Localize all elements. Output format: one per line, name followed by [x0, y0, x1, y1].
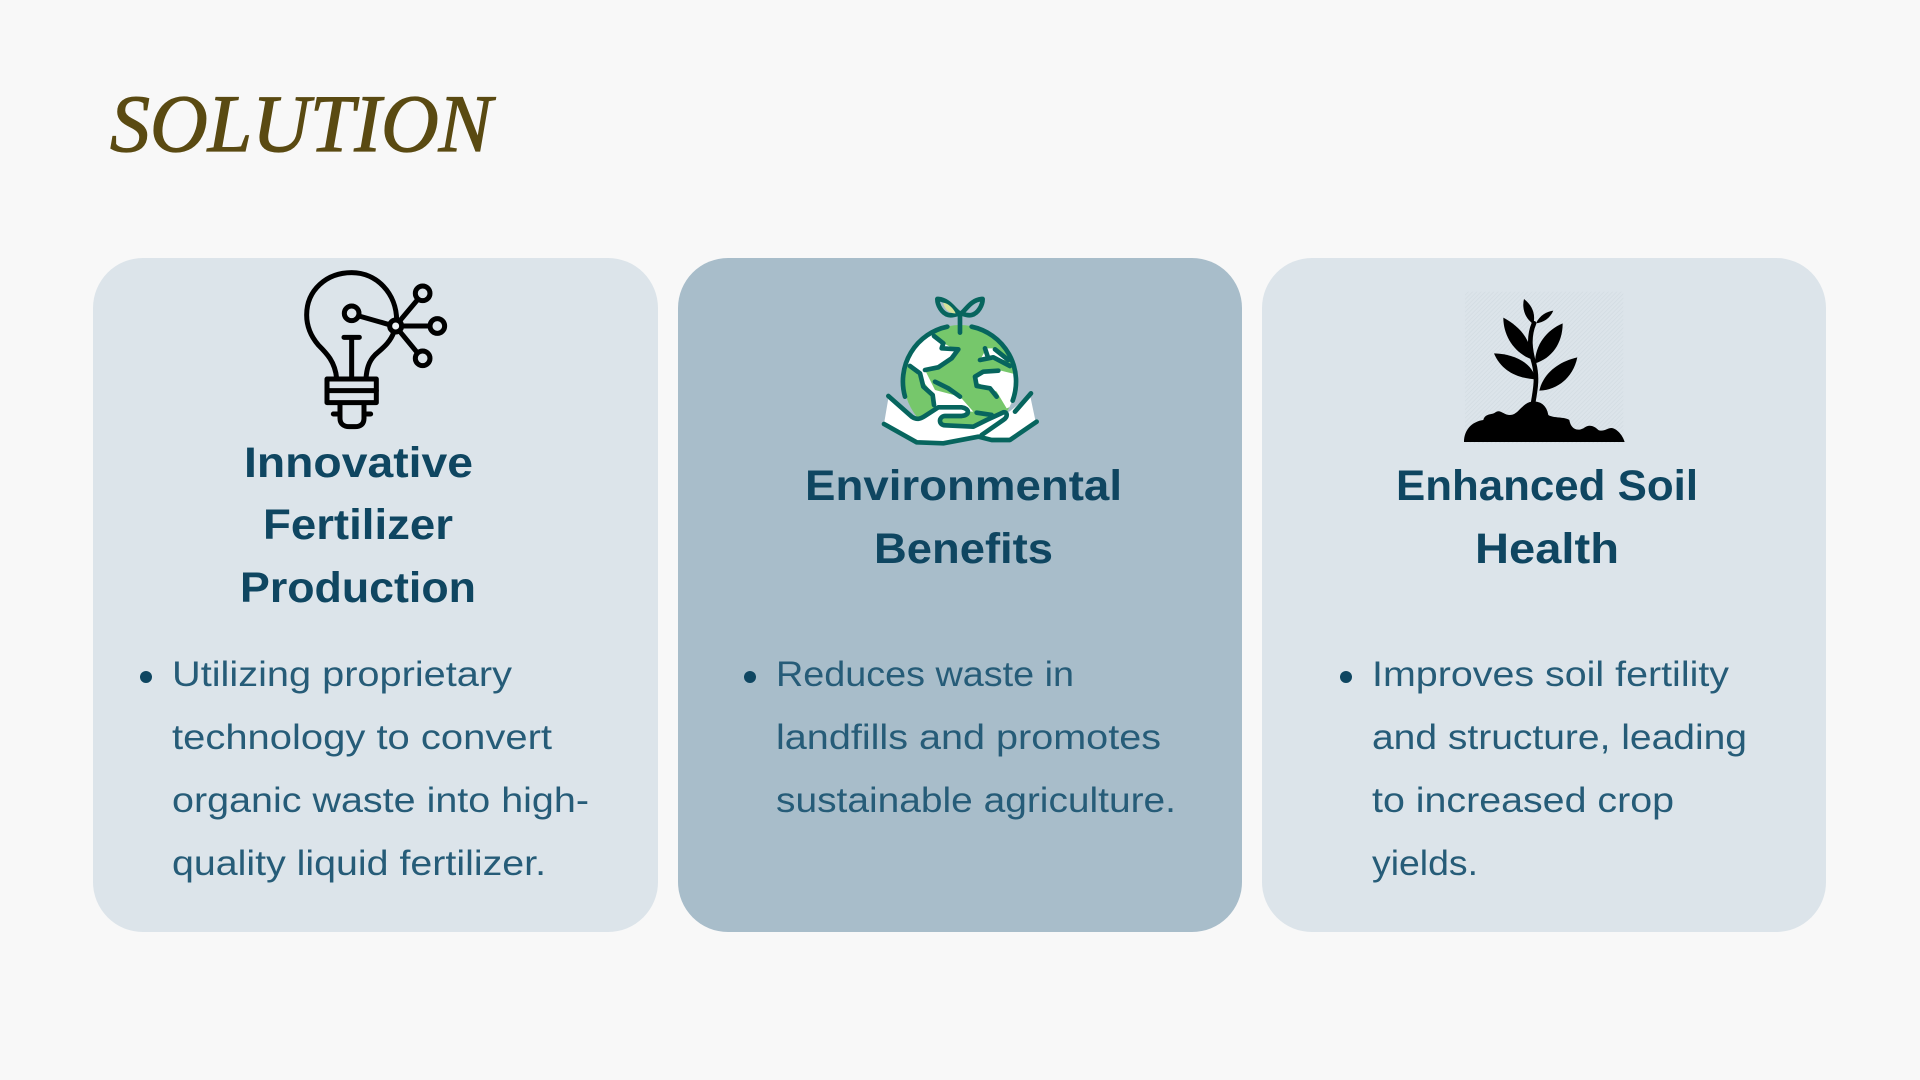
heading: Environmental [805, 462, 1122, 510]
card background [678, 258, 1242, 932]
panel: enhanced soil health [1262, 258, 1826, 932]
icon: light bulb with network nodes [307, 273, 445, 427]
bullet text [744, 655, 1176, 820]
icon: plant sprouting from soil [1464, 292, 1625, 443]
card background [1262, 258, 1826, 932]
heading: Innovative [244, 439, 473, 487]
bullet text: and structure, leading [1372, 718, 1747, 757]
heading [805, 462, 1122, 573]
panel: environmental benefits [678, 258, 1242, 932]
bullet text: landfills and promotes [776, 718, 1161, 757]
heading: Enhanced Soil [1396, 462, 1698, 510]
bullet text [1340, 655, 1747, 883]
bullet text: organic waste into high- [172, 781, 589, 820]
bullet text: Improves soil fertility [1372, 655, 1730, 694]
heading [240, 439, 476, 612]
heading [1396, 462, 1698, 573]
panel: innovative fertilizer production [93, 258, 658, 932]
bullet text: sustainable agriculture. [776, 781, 1176, 820]
bullet text: quality liquid fertilizer. [172, 844, 546, 883]
bullet text: Reduces waste in [776, 655, 1074, 694]
icon: globe held in hands with sprout [884, 299, 1037, 443]
bullet text [140, 655, 589, 883]
bullet text: Utilizing proprietary [172, 655, 513, 694]
heading: Fertilizer [263, 501, 453, 549]
title: SOLUTION [110, 78, 496, 169]
bullet text: technology to convert [172, 718, 552, 757]
heading: Production [240, 564, 476, 612]
heading: Health [1475, 525, 1619, 573]
bullet text: to increased crop [1372, 781, 1674, 820]
heading: Benefits [874, 525, 1053, 573]
card background [93, 258, 658, 932]
bullet text: yields. [1372, 844, 1478, 883]
